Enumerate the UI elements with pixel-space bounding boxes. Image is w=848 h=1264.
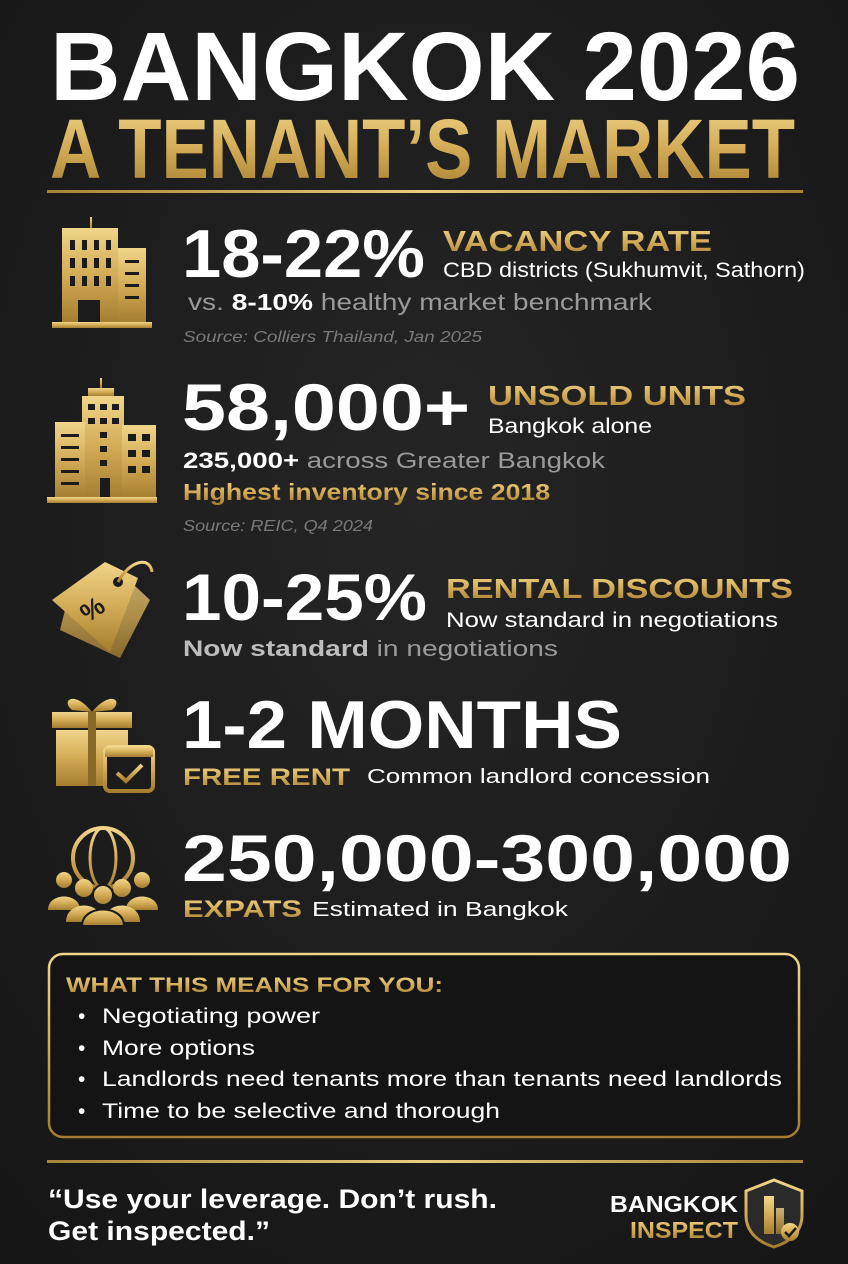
stat: unsold units: Bangkok alone xyxy=(488,415,652,438)
logo: Bangkok Inspect xyxy=(610,1180,802,1247)
panel: what this means for you: More options xyxy=(102,1037,255,1060)
title: BANGKOK 2026 xyxy=(50,12,800,121)
stat: vacancy rate: Source: Colliers Thailand, Jan 2025 xyxy=(183,329,482,346)
stat: expats xyxy=(48,821,792,926)
icon: globe with people xyxy=(48,828,158,926)
quote xyxy=(48,1184,497,1246)
stat: expats: 250,000-300,000 xyxy=(182,821,792,895)
stat: vacancy rate: 18-22% xyxy=(182,216,425,292)
stat: vacancy rate: CBD districts (Sukhumvit, Sathorn) xyxy=(443,259,805,282)
icon: office building xyxy=(52,217,152,328)
logo: Bangkok Inspect: INSPECT xyxy=(630,1217,738,1243)
panel: what this means for you xyxy=(49,954,799,1137)
stat: rental discounts xyxy=(52,560,793,661)
stat: unsold units: Highest inventory since 2018 xyxy=(183,479,550,505)
stat: unsold units: UNSOLD UNITS xyxy=(488,380,746,411)
stat: unsold units: 235,000+ across Greater Bangkok xyxy=(183,448,606,473)
stat: unsold units xyxy=(47,370,746,535)
icon: gift with calendar xyxy=(52,699,153,791)
stat: rental discounts: Now standard in negotiations xyxy=(446,609,778,632)
icon: price tags: % xyxy=(74,590,110,628)
panel: what this means for you: Landlords need tenants more than tenants need landlords xyxy=(102,1068,782,1091)
logo: Bangkok Inspect: BANGKOK xyxy=(610,1191,738,1217)
stat: vacancy rate: VACANCY RATE xyxy=(443,226,712,258)
icon: apartment buildings xyxy=(47,378,157,503)
quote: Get inspected.” xyxy=(48,1216,270,1246)
stat: free rent xyxy=(52,687,710,791)
panel: what this means for you: • xyxy=(78,1068,85,1091)
panel: what this means for you: • xyxy=(78,1100,85,1123)
stat: vacancy rate: vs. 8-10% healthy market benchmark xyxy=(188,289,653,315)
panel: what this means for you: Time to be selective and thorough xyxy=(102,1100,500,1123)
stat: unsold units: 58,000+ xyxy=(182,370,470,444)
stat: rental discounts: Now standard in negotiations xyxy=(183,636,558,661)
panel: what this means for you: WHAT THIS MEANS FOR YOU: xyxy=(66,974,443,997)
stat: rental discounts: 10-25% xyxy=(182,560,427,634)
stat: vacancy rate xyxy=(52,216,805,346)
panel: what this means for you: • xyxy=(78,1037,85,1060)
panel: what this means for you: • xyxy=(78,1005,85,1028)
stat: rental discounts: RENTAL DISCOUNTS xyxy=(446,573,793,604)
stat: unsold units: Source: REIC, Q4 2024 xyxy=(183,518,373,535)
stat: expats: Estimated in Bangkok xyxy=(312,899,569,921)
panel: what this means for you: Negotiating power xyxy=(102,1005,320,1028)
stat: free rent: Common landlord concession xyxy=(367,766,710,788)
icon: price tags xyxy=(52,562,152,658)
stat: free rent: FREE RENT xyxy=(183,764,350,791)
stat: free rent: 1-2 MONTHS xyxy=(182,687,622,763)
title xyxy=(50,12,800,196)
quote: “Use your leverage. Don’t rush. xyxy=(48,1184,497,1214)
stat: expats: EXPATS xyxy=(183,896,302,923)
